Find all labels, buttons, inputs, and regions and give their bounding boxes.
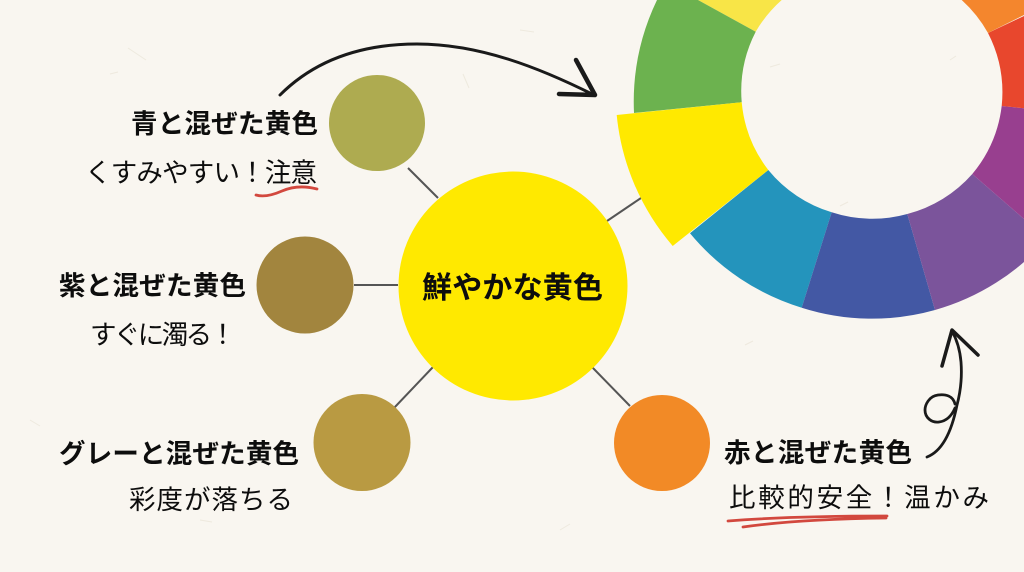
label: red mix: 赤と混ぜた黄色 (724, 438, 912, 468)
segment: teal (690, 170, 832, 308)
circle: vivid yellow centre: 鮮やかな黄色 (422, 272, 603, 305)
label: purple mix: すぐに濁る！ (90, 320, 236, 350)
label: red mix: 比較的安全！温かみ (729, 483, 989, 513)
label: purple mix: 紫と混ぜた黄色 (59, 271, 246, 301)
circle: vivid yellow centre (398, 172, 628, 400)
label: grey mix: グレーと混ぜた黄色 (59, 439, 299, 469)
label: blue mix (85, 109, 318, 196)
label: grey mix: 彩度が落ちる (129, 485, 293, 515)
label: purple mix (59, 271, 246, 350)
circle: yellow mixed with blue (329, 75, 425, 171)
segment: light yellow (698, 0, 800, 32)
label: blue mix: 青と混ぜた黄色 (131, 109, 318, 139)
label: grey mix (59, 439, 299, 515)
arrow: looped arrow up to the wheel (925, 330, 978, 457)
segment: magenta (972, 106, 1024, 239)
segment: highlighted yellow (617, 102, 768, 246)
segment: orange (950, 0, 1024, 33)
segment: red (988, 0, 1024, 116)
colour wheel (617, 0, 1024, 319)
circle: yellow mixed with red (614, 395, 710, 491)
segment: green (634, 0, 756, 113)
label: red mix (724, 438, 989, 527)
arrow: curved arrow to the wheel (280, 44, 595, 95)
circle: yellow mixed with purple (256, 236, 354, 334)
segment: purple (907, 174, 1024, 310)
circle: yellow mixed with grey (314, 394, 410, 491)
segment: indigo (802, 212, 935, 319)
connector lines (354, 168, 641, 408)
label: blue mix: くすみやすい！注意 (85, 158, 317, 188)
